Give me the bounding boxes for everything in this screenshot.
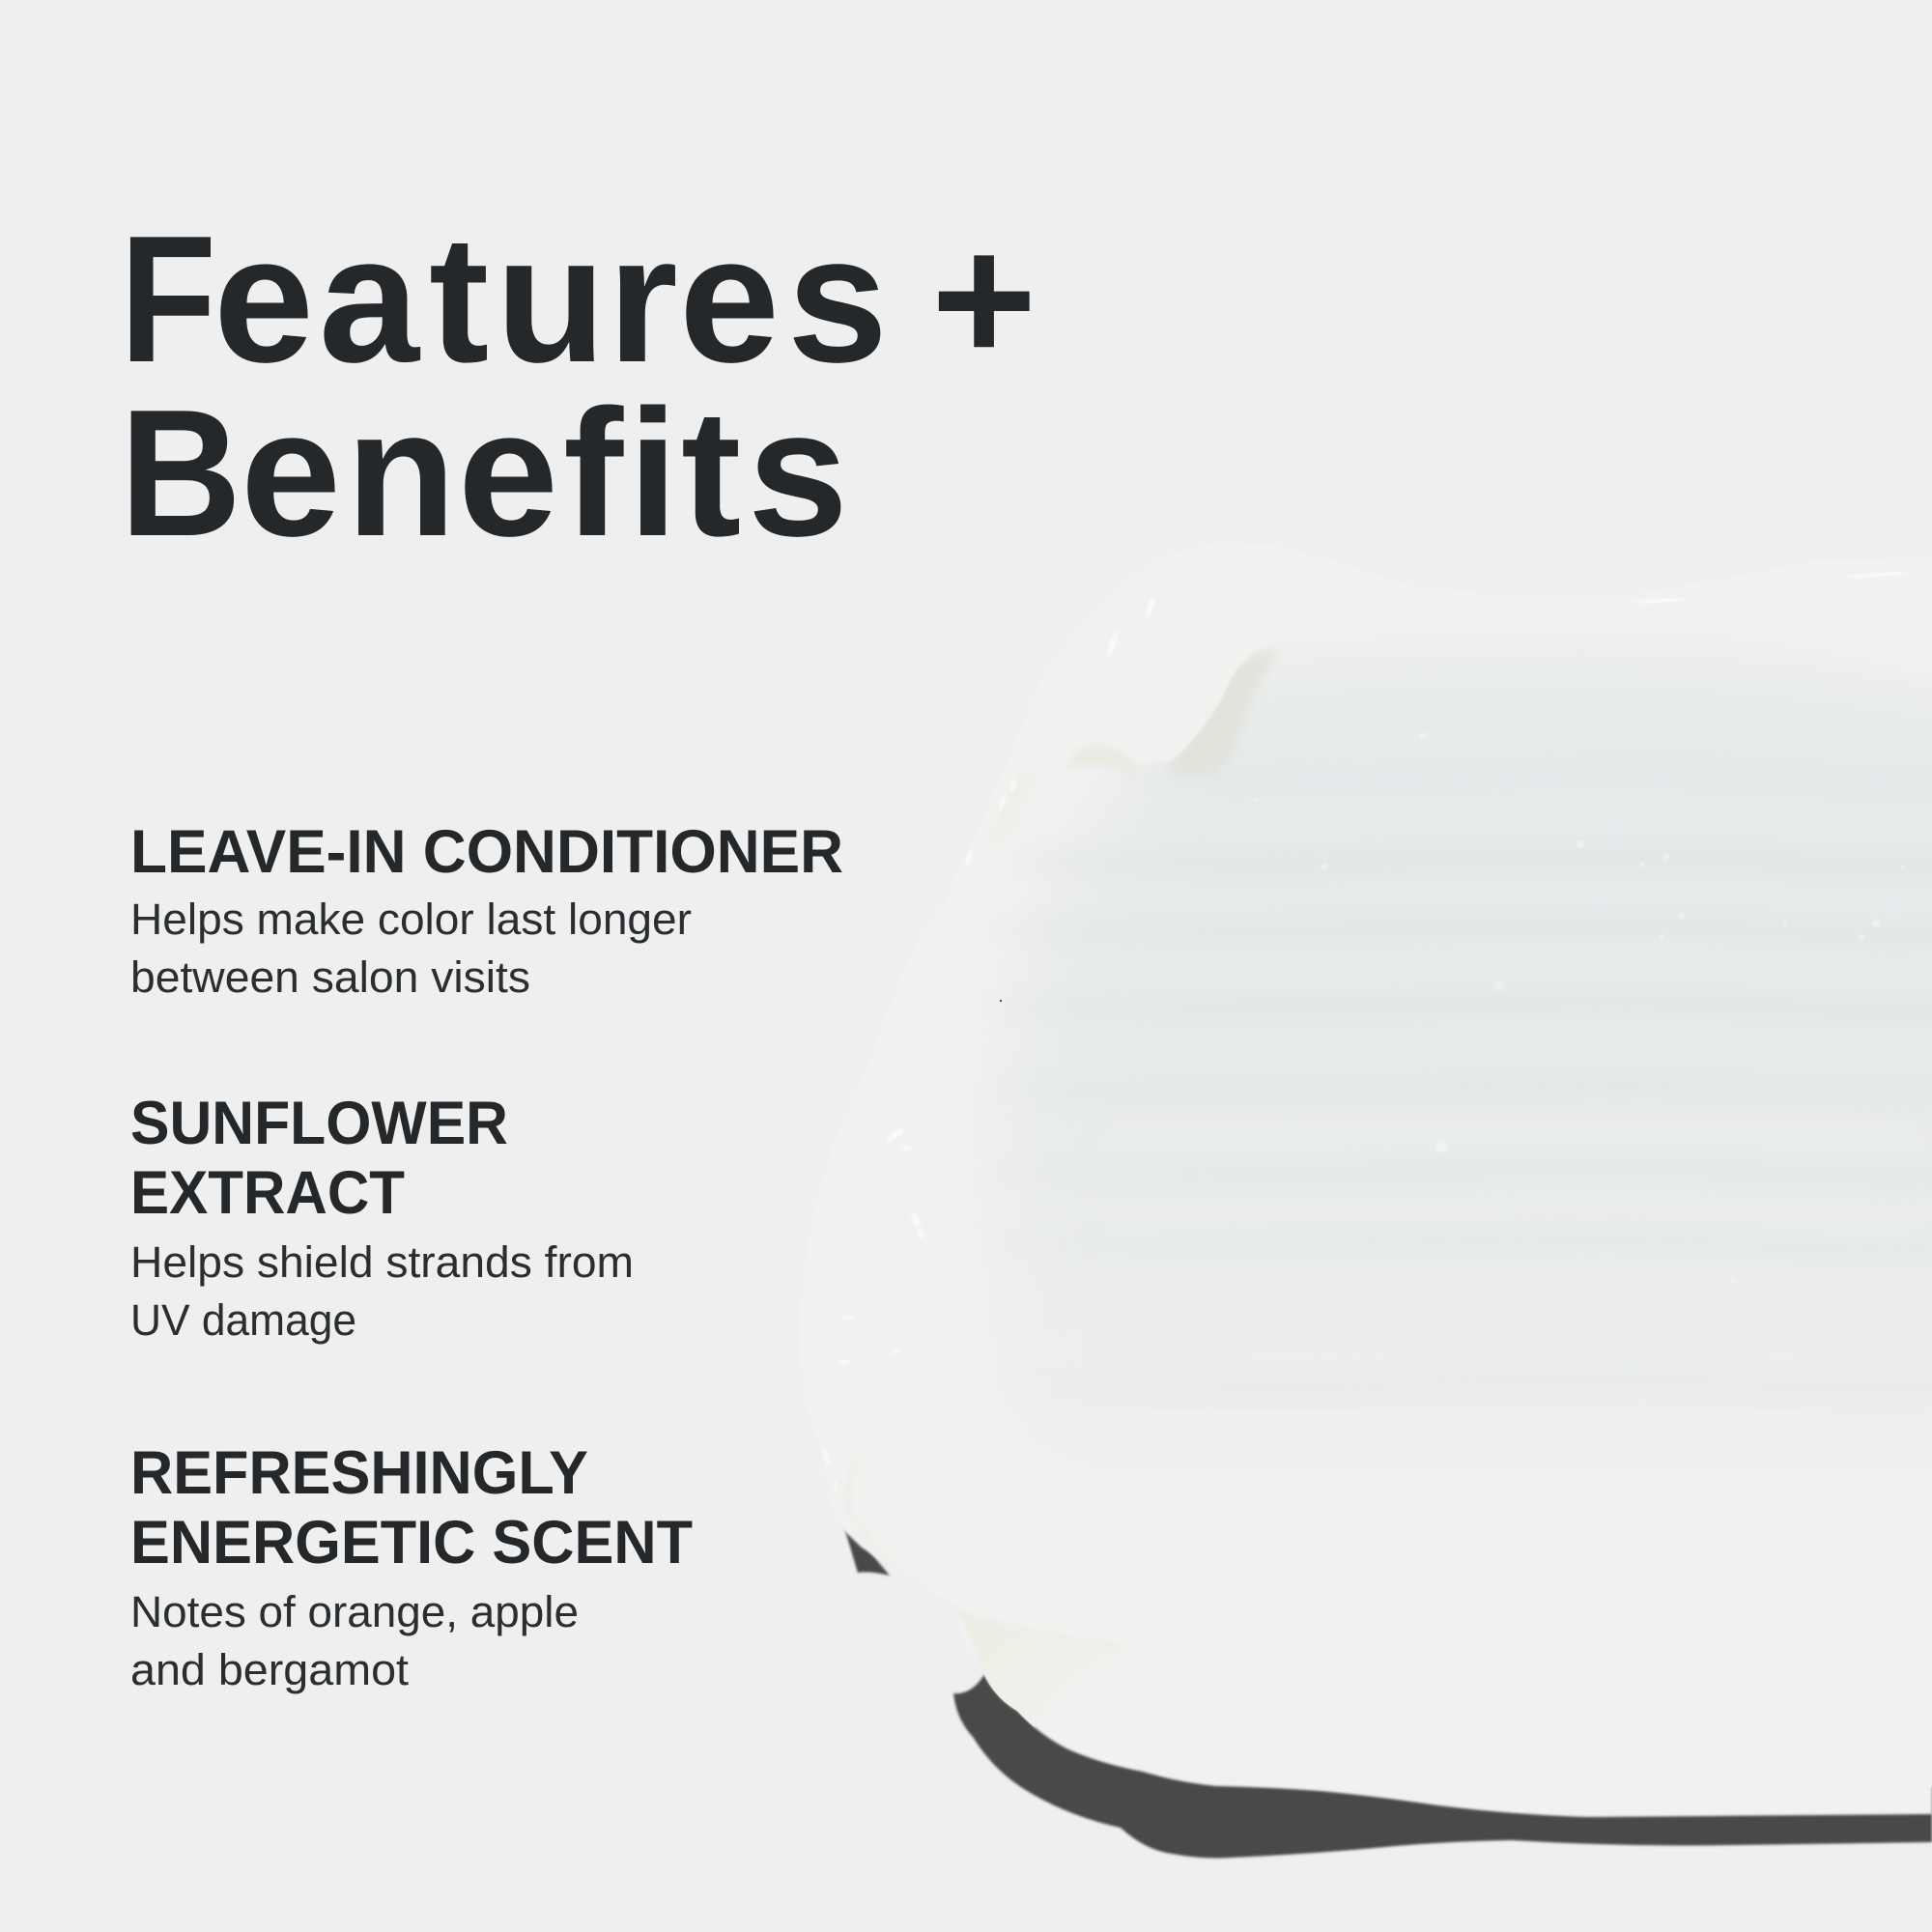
title: eatures +	[213, 198, 1037, 400]
left fold shade	[985, 773, 1036, 850]
description: and bergamot	[130, 1645, 410, 1694]
heading	[130, 1090, 508, 1227]
cream surface texture	[960, 650, 1932, 1727]
description: UV damage	[130, 1295, 356, 1345]
heading: REFRESHINGLY	[130, 1439, 588, 1507]
description	[130, 1587, 579, 1694]
title: enefits	[241, 372, 848, 574]
description	[130, 1237, 634, 1345]
heading: SUNFLOWER	[130, 1090, 508, 1157]
speck	[1000, 1000, 1002, 1002]
cream swatch	[799, 543, 1932, 1817]
title: B	[120, 372, 242, 574]
description: Helps make color last longer	[130, 895, 692, 944]
lower lobe	[962, 1617, 1036, 1727]
cream shadow	[843, 1524, 1932, 1859]
ridge upper lobe	[1165, 659, 1244, 761]
heading: LEAVE-IN CONDITIONER	[130, 818, 843, 886]
title	[120, 198, 1037, 574]
description: Helps shield strands from	[130, 1237, 634, 1287]
feature: refreshingly energetic scent	[130, 1439, 693, 1694]
description	[130, 895, 692, 1002]
heading: EXTRACT	[130, 1159, 405, 1227]
fold crease	[1169, 652, 1277, 776]
heading: ENERGETIC SCENT	[130, 1509, 693, 1577]
feature: sunflower extract	[130, 1090, 634, 1345]
brushed inner area	[1096, 701, 1931, 1050]
description: between salon visits	[130, 952, 530, 1002]
brush ridges	[966, 774, 1932, 1390]
heading	[130, 1439, 693, 1577]
cream body	[799, 543, 1932, 1817]
feature: leave-in conditioner	[130, 818, 843, 1002]
description: Notes of orange, apple	[130, 1587, 579, 1636]
overhang crease	[849, 1456, 1125, 1648]
small fold lobe	[1072, 746, 1134, 777]
surface speckles	[1254, 732, 1905, 1283]
highlights	[821, 571, 1913, 1491]
title: F	[120, 198, 216, 400]
top ridge highlight	[1256, 551, 1932, 676]
